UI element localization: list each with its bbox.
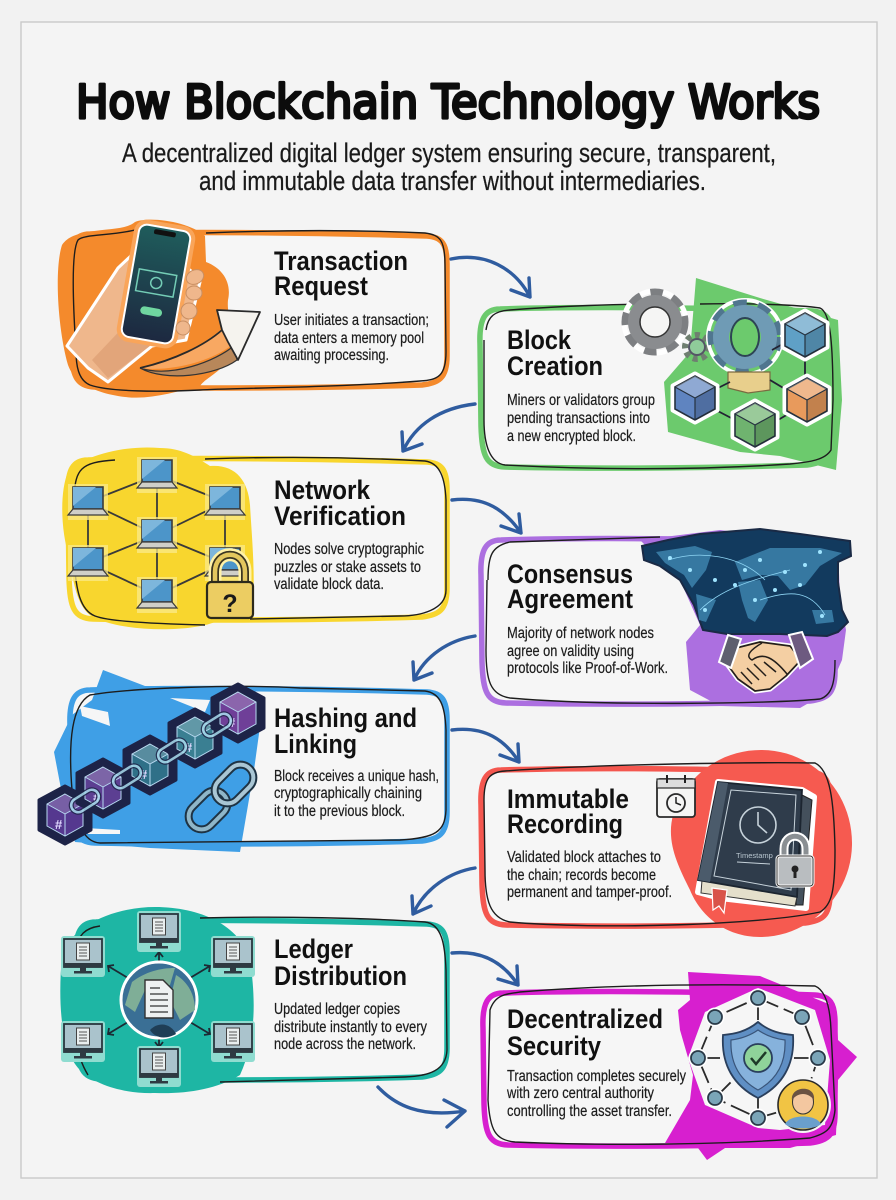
text: transaction request body: User initiates a transaction;	[274, 312, 429, 329]
text: decentralized security body: Transaction completes securely	[507, 1068, 686, 1085]
heading: transaction request: Request	[274, 271, 368, 301]
subtitle	[122, 138, 776, 196]
heading: block creation: Creation	[507, 351, 603, 381]
panel: transaction request	[58, 220, 447, 398]
text: block creation body: a new encrypted block.	[507, 428, 636, 445]
heading: consensus agreement: Consensus	[507, 559, 633, 589]
heading: hashing and linking: Linking	[274, 729, 357, 759]
icon: padlock with question mark	[207, 555, 253, 618]
heading: ledger distribution: Distribution	[274, 961, 407, 991]
panel: decentralized security	[483, 972, 857, 1160]
subtitle: A decentralized digital ledger system ensuring secure, transparent,	[122, 138, 776, 168]
arrow: step 6 to 7	[412, 868, 475, 914]
text: transaction request body: awaiting processing.	[274, 347, 389, 364]
text: decentralized security body: controlling the asset transfer.	[507, 1103, 672, 1120]
text: decentralized security body	[506, 1068, 686, 1120]
icon: blue gear	[708, 300, 782, 374]
panel: network verification	[62, 447, 447, 629]
icon: tan central block	[728, 372, 770, 393]
text: hashing and linking body: Block receives a unique hash,	[274, 768, 439, 785]
heading: block creation: Block	[507, 325, 571, 355]
text: hashing and linking body: cryptographically chaining	[274, 785, 422, 802]
text: network verification body: puzzles or stake assets to	[274, 559, 421, 576]
panel: block creation	[480, 278, 842, 470]
text: immutable recording body: the chain; records become	[507, 867, 656, 884]
icon: network links	[698, 998, 818, 1118]
heading: decentralized security	[507, 1004, 663, 1061]
icon: white network halo	[688, 988, 830, 1130]
heading: consensus agreement: Agreement	[507, 584, 633, 614]
heading: immutable recording: Recording	[507, 809, 623, 839]
text: immutable recording body	[507, 849, 672, 901]
text: block creation body: Miners or validators group	[507, 392, 655, 409]
text: consensus agreement body: agree on validity using	[507, 643, 634, 660]
arrow: step 7 to 8	[452, 953, 518, 985]
text: ledger distribution body	[274, 1001, 427, 1053]
title: How Blockchain Technology Works	[76, 75, 820, 129]
text: block creation body: pending transactions into	[507, 410, 650, 427]
icon: calendar with clock	[657, 775, 695, 817]
heading: network verification: Network	[274, 475, 370, 505]
icon: connection lines	[712, 340, 805, 420]
icon: chain link	[183, 759, 259, 835]
subtitle: and immutable data transfer without intermediaries.	[199, 166, 706, 196]
icon: blocks	[673, 311, 829, 449]
heading: transaction request	[274, 246, 408, 301]
text: hashing and linking body: it to the previous block.	[274, 803, 405, 820]
text: ledger distribution body: distribute instantly to every	[274, 1019, 427, 1036]
heading: immutable recording	[507, 784, 629, 839]
text: block creation body	[507, 392, 655, 445]
heading: decentralized security: Security	[507, 1031, 601, 1061]
arrow: step 3 to 4	[452, 499, 521, 533]
text: immutable recording body: Validated block attaches to	[507, 849, 661, 866]
heading: network verification	[274, 475, 406, 531]
icon: padlock with question mark: ?	[222, 590, 238, 618]
text: transaction request body: data enters a memory pool	[274, 330, 424, 347]
icon: hand holding phone	[67, 220, 206, 382]
text: decentralized security body: with zero central authority	[506, 1085, 654, 1102]
text: network verification body: Nodes solve cryptographic	[274, 541, 424, 558]
text: transaction request body	[274, 312, 429, 364]
arrow: step 1 to 2	[451, 257, 530, 297]
heading: immutable recording: Immutable	[507, 784, 629, 814]
arrow: step 8 loop	[378, 1087, 465, 1127]
text: immutable recording body: permanent and tamper-proof.	[507, 884, 672, 901]
text: ledger distribution body: Updated ledger copies	[274, 1001, 400, 1018]
icon: small green gear	[685, 335, 709, 359]
icon: laptops	[68, 457, 245, 613]
panel: hashing and linking	[39, 670, 447, 852]
text: network verification body: validate block data.	[274, 576, 384, 593]
panel: consensus agreement	[481, 529, 851, 708]
arrow: step 4 to 5	[413, 636, 475, 680]
icon: handshake	[719, 632, 813, 691]
heading: decentralized security: Decentralized	[507, 1004, 663, 1034]
heading: ledger distribution: Ledger	[274, 934, 353, 964]
icon: globe with document	[121, 962, 197, 1038]
heading: block creation	[507, 325, 603, 381]
icon: locked book	[698, 782, 814, 913]
text: consensus agreement body	[507, 625, 668, 677]
icon: shield with check	[723, 1022, 793, 1098]
heading: hashing and linking: Hashing and	[274, 703, 417, 733]
icon: distribution arrows	[108, 952, 210, 1047]
icon: gray gear	[624, 291, 686, 353]
text: ledger distribution body: node across the network.	[274, 1036, 416, 1053]
icon: hash block chain	[39, 684, 264, 844]
heading: network verification: Verification	[274, 501, 406, 531]
arrow: step 2 to 3	[402, 404, 475, 451]
icon: monitors	[61, 911, 255, 1087]
arrow: step 5 to 6	[452, 729, 519, 762]
text: consensus agreement body: protocols like Proof-of-Work.	[507, 660, 668, 677]
icon: network lines	[88, 475, 225, 595]
text: hashing and linking body	[274, 768, 439, 820]
heading: transaction request: Transaction	[274, 246, 408, 276]
heading: hashing and linking	[274, 703, 417, 759]
icon: locked book: Timestamp	[736, 851, 773, 860]
icon: world map	[642, 529, 851, 636]
text: network verification body	[274, 541, 424, 593]
icon: network nodes	[688, 988, 828, 1128]
panel: ledger distribution	[60, 907, 447, 1093]
icon: upward arrow	[140, 310, 260, 376]
heading: consensus agreement	[507, 559, 633, 614]
icon: user avatar	[775, 1077, 831, 1133]
panel: immutable recording	[481, 750, 852, 937]
text: consensus agreement body: Majority of network nodes	[507, 625, 654, 642]
heading: ledger distribution	[274, 934, 407, 991]
